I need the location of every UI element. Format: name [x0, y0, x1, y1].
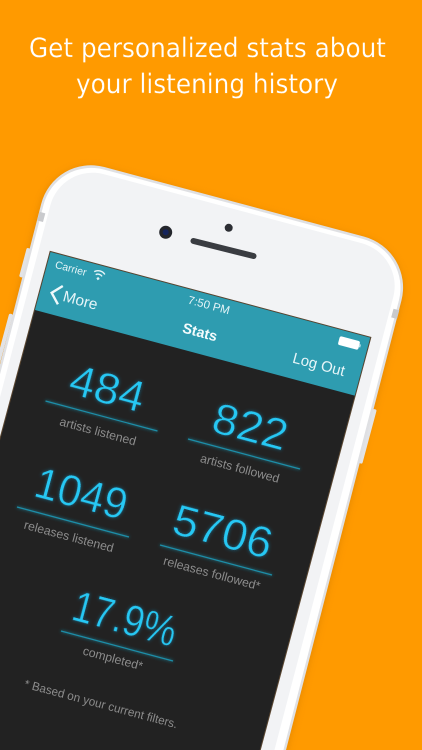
stat: artists followed [188, 393, 300, 486]
title: Get personalized stats about [29, 33, 386, 64]
stat: releases followed [160, 495, 278, 593]
wifi icon [93, 270, 105, 280]
navigation bar [35, 252, 370, 396]
stat: artists followed: artists followed [199, 451, 281, 486]
front camera [159, 226, 172, 239]
stat: artists listened: 484 [64, 355, 150, 422]
stat: artists followed: 822 [207, 393, 293, 460]
stat: artists listened: artists listened [58, 415, 138, 448]
phone front face [0, 163, 404, 750]
stat: releases followed: releases followed* [162, 554, 262, 593]
stat: releases listened: releases listened [22, 518, 115, 555]
screen title: Stats [181, 321, 219, 345]
back label: More [61, 288, 100, 314]
stat: completed: completed* [81, 644, 145, 673]
sensor [225, 224, 233, 232]
title [29, 33, 386, 100]
stat: releases listened [17, 458, 133, 555]
stat: artists listened [46, 355, 158, 448]
phone shadow [0, 156, 414, 750]
antenna bands [37, 212, 400, 319]
screen edge [0, 251, 371, 750]
speaker [194, 241, 254, 256]
carrier label: Carrier [54, 259, 88, 279]
phone inner rim [0, 157, 411, 750]
screen content [0, 252, 370, 750]
title: your listening history [76, 69, 338, 100]
stat: releases listened: 1049 [30, 458, 133, 530]
side buttons [0, 248, 394, 466]
stat: completed: 17.9% [67, 582, 182, 656]
footnote: * Based on your current filters. [23, 677, 179, 731]
phone outer frame [0, 154, 414, 750]
log out button: Log Out [291, 350, 348, 380]
phone [0, 153, 422, 750]
battery icon [338, 336, 362, 350]
screen [0, 251, 371, 750]
back chevron [49, 284, 63, 304]
time: 7:50 PM [187, 295, 231, 317]
stat: releases followed: 5706 [168, 495, 278, 569]
